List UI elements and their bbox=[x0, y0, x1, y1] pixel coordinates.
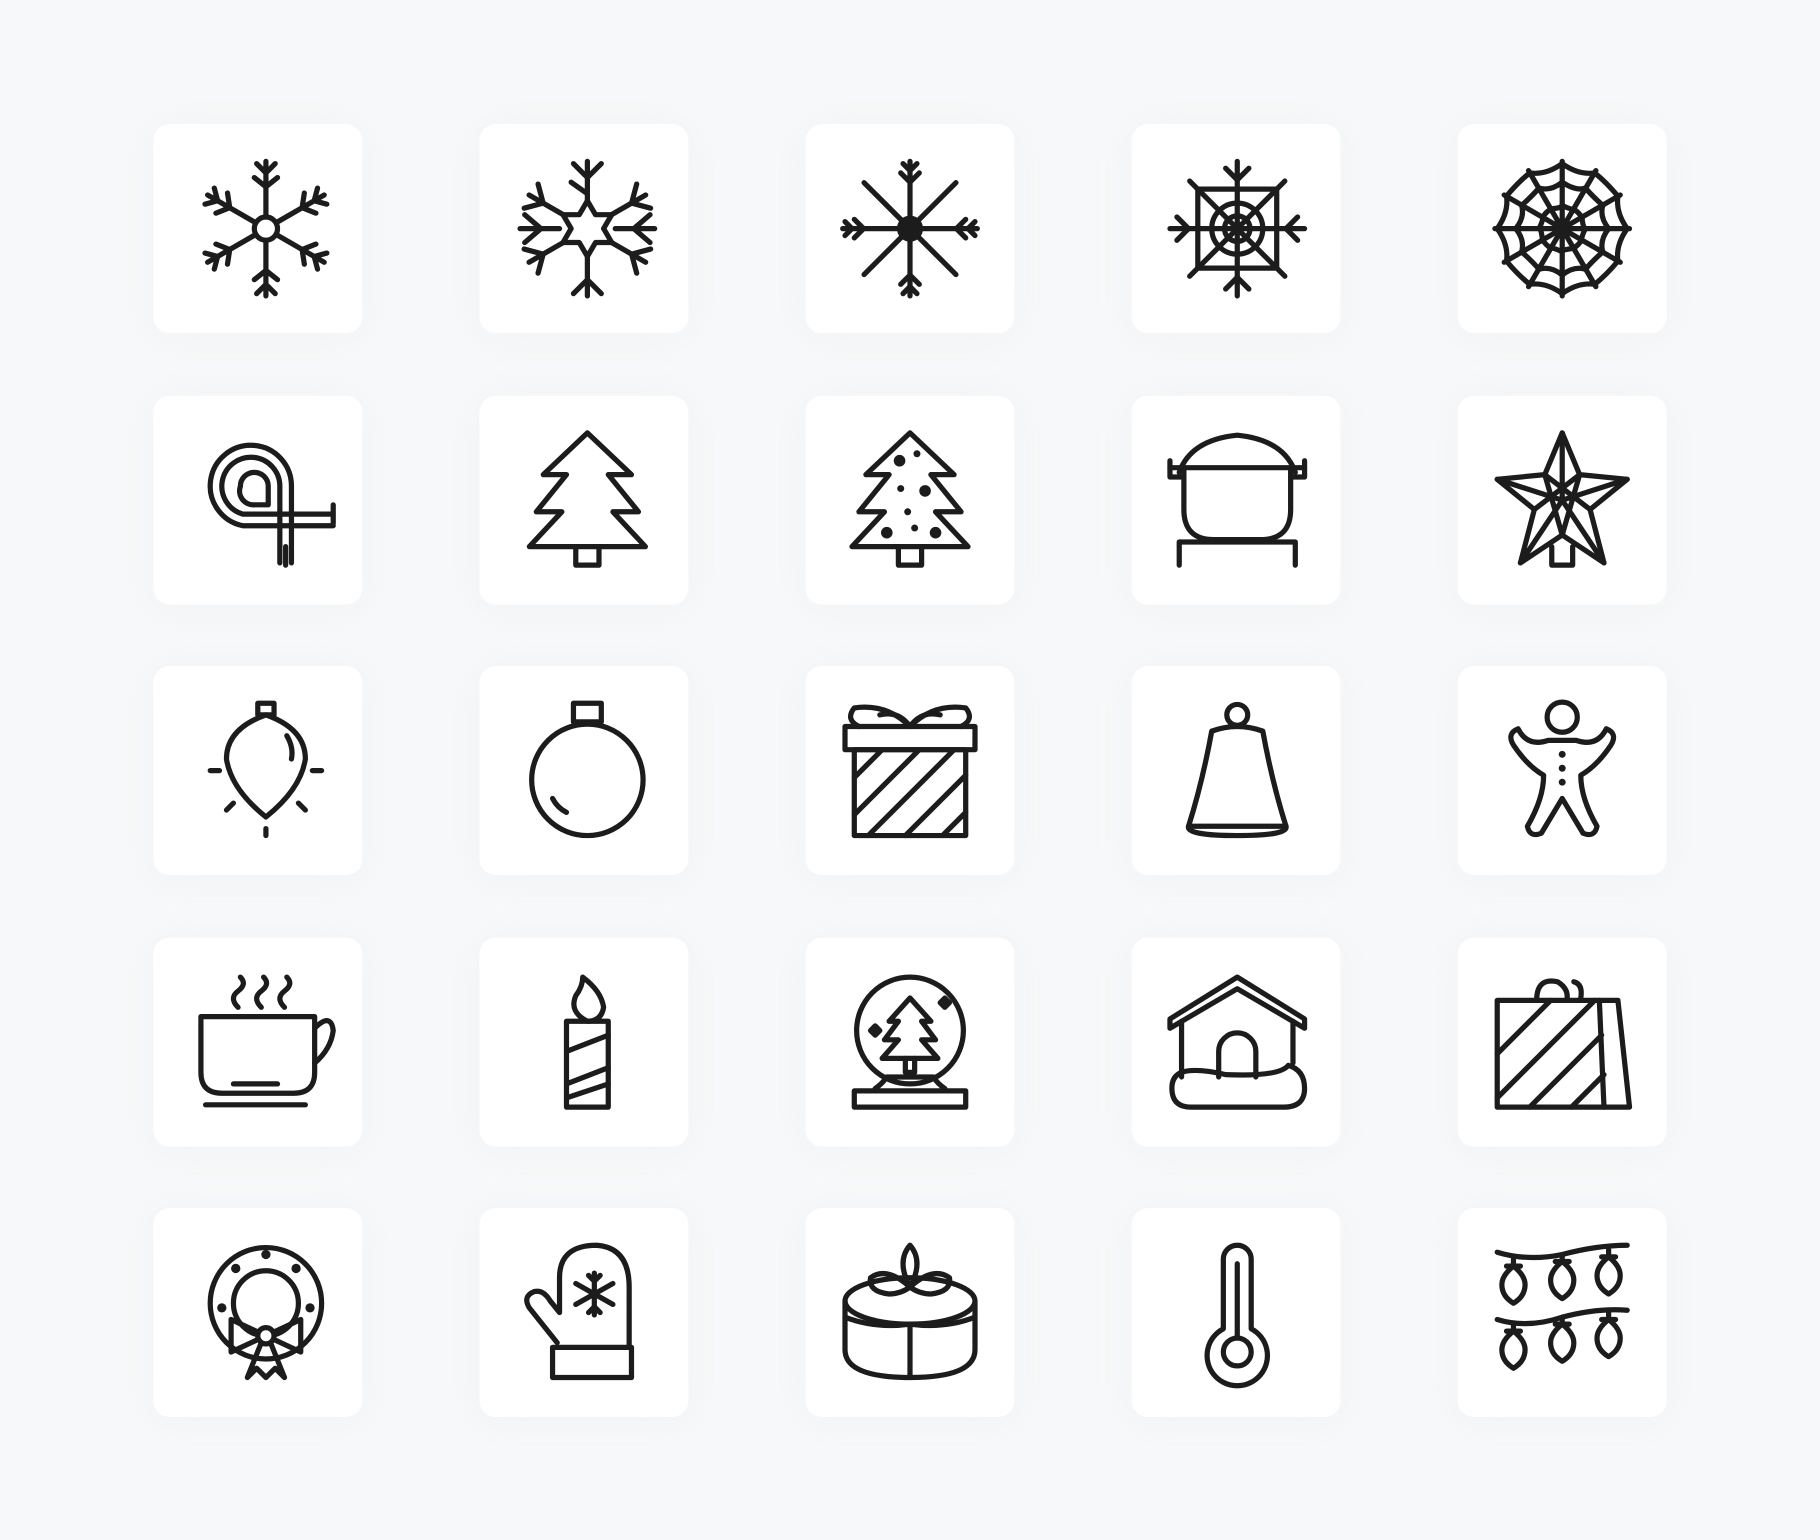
icon: bell bbox=[1188, 704, 1286, 836]
icon: light bulb bbox=[210, 703, 322, 836]
icon: spider web bbox=[1495, 161, 1630, 296]
icon: scarf bbox=[210, 445, 333, 565]
icon: wreath bbox=[210, 1248, 322, 1378]
icon: thermometer bbox=[1207, 1245, 1267, 1386]
icon: snowflake 3 bbox=[843, 161, 977, 296]
icon: snow globe bbox=[854, 977, 966, 1107]
icon: tree star bbox=[1497, 433, 1627, 565]
icon: hot cup bbox=[201, 977, 333, 1105]
icon: pine tree bbox=[529, 433, 645, 565]
icon: snowy house bbox=[1170, 977, 1305, 1107]
icon: mitten bbox=[527, 1245, 631, 1378]
icon: ornament ball bbox=[532, 703, 643, 836]
icon: round gift bbox=[845, 1245, 975, 1378]
icon: gingerbread man bbox=[1511, 702, 1614, 835]
icon: cooking pot bbox=[1170, 435, 1305, 565]
icon: snowflake 1 bbox=[202, 161, 330, 296]
icon: gift box bbox=[845, 707, 975, 836]
icon: shopping bag bbox=[1497, 981, 1630, 1107]
icon: decorated tree bbox=[852, 433, 968, 565]
icon: snowflake 4 bbox=[1170, 161, 1305, 296]
icon: snowflake 2 bbox=[520, 161, 655, 296]
icon: candle bbox=[566, 977, 608, 1107]
icon: string lights bbox=[1497, 1245, 1627, 1368]
